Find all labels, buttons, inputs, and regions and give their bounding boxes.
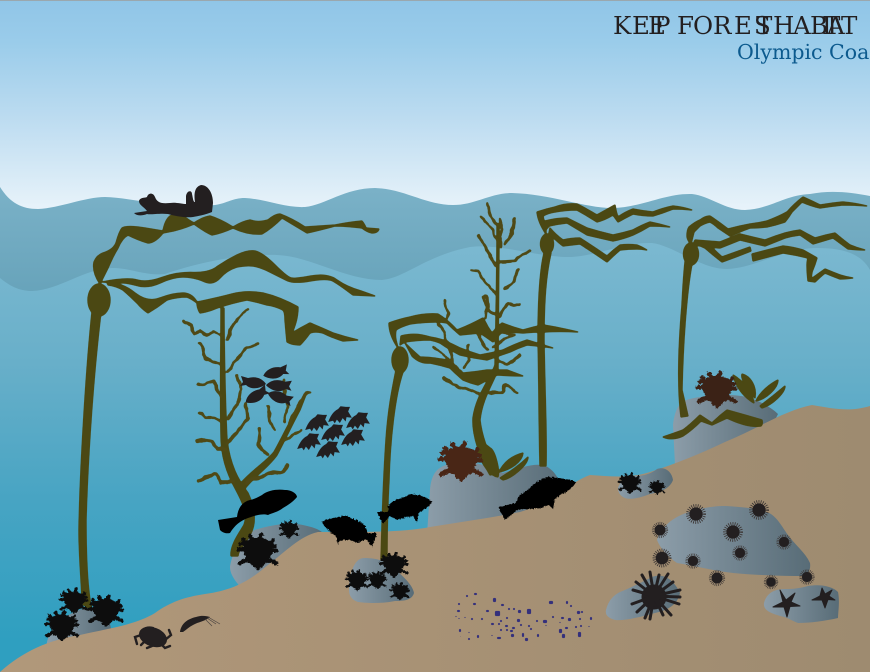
big rockfish: over left kelp [218,490,297,533]
title: T [824,11,841,40]
leaf cluster [733,375,754,403]
title: I [822,11,832,40]
black seaweed clumps [46,474,664,639]
base leaves [477,444,498,477]
blade: upper long frond [102,251,375,296]
rock: right boulder with kelp [673,395,778,470]
sea star right [812,588,835,608]
float bulb [88,284,110,316]
title: E [632,11,650,40]
title: T [756,11,773,40]
clump group: central sand rock [346,553,409,599]
school of small rockfish [294,404,371,461]
sky background [0,0,870,215]
sea otter floating on surface [134,185,213,217]
herring eggs scatter [455,593,592,641]
title: A [826,11,845,40]
big rockfish: near second kelp [377,494,432,524]
title: K [613,11,632,40]
giant kelp: centre plant with base leaves [433,204,530,480]
bull kelp: second plant [381,314,578,562]
back wave of the sea surface [0,187,870,320]
title: E [648,11,666,40]
creeping blade on rock [663,410,762,439]
title: H [773,11,794,40]
big rockfish: on boulder [498,477,576,520]
title: O [693,11,713,40]
sunflower sea star [632,572,680,619]
sand sea floor [0,405,870,672]
title: F [677,11,694,40]
bull kelp: far left plant with long blades [79,214,379,610]
title: T [841,11,858,40]
sea star left [773,590,800,617]
school of small dark fish [240,364,295,408]
title: P [654,11,670,40]
front body of water [0,243,870,672]
rock: sea star rocks [764,585,839,623]
title: R [713,11,733,40]
stipe [79,312,101,610]
rock: large mid boulder [427,462,562,535]
giant kelp: left plant [184,308,309,556]
title: A [792,11,811,40]
big rockfish: above sand shelf [322,516,377,547]
rock: large urchin boulder [657,506,810,576]
title: B [810,11,828,40]
title: E [734,11,752,40]
urchins [654,502,813,588]
brown seaweed on right boulder [697,373,735,406]
bull kelp: right plant [663,197,867,439]
blade: top surface frond [94,214,379,284]
rock: sunflower star rock [606,576,680,620]
bull kelp: third plant [537,204,692,466]
rocks on the sand [349,468,839,623]
clump group: small shelf rock [619,474,664,494]
shrimp [180,616,220,632]
clump group: bottom left rock [46,589,122,639]
kelp forest [79,197,867,610]
blade: lower thick frond [107,282,358,345]
sea stars [773,588,835,617]
clump group: kelp rock [238,521,298,568]
crab [135,624,171,650]
rock: bottom left [47,608,111,655]
brown seaweed on centre boulder [440,443,481,479]
rocks behind the sand [47,395,778,655]
rock: small rock near shelf [618,468,673,499]
title: S [754,11,771,40]
rock: under small giant kelp [230,524,324,590]
rock: with seaweed clumps [349,558,414,603]
